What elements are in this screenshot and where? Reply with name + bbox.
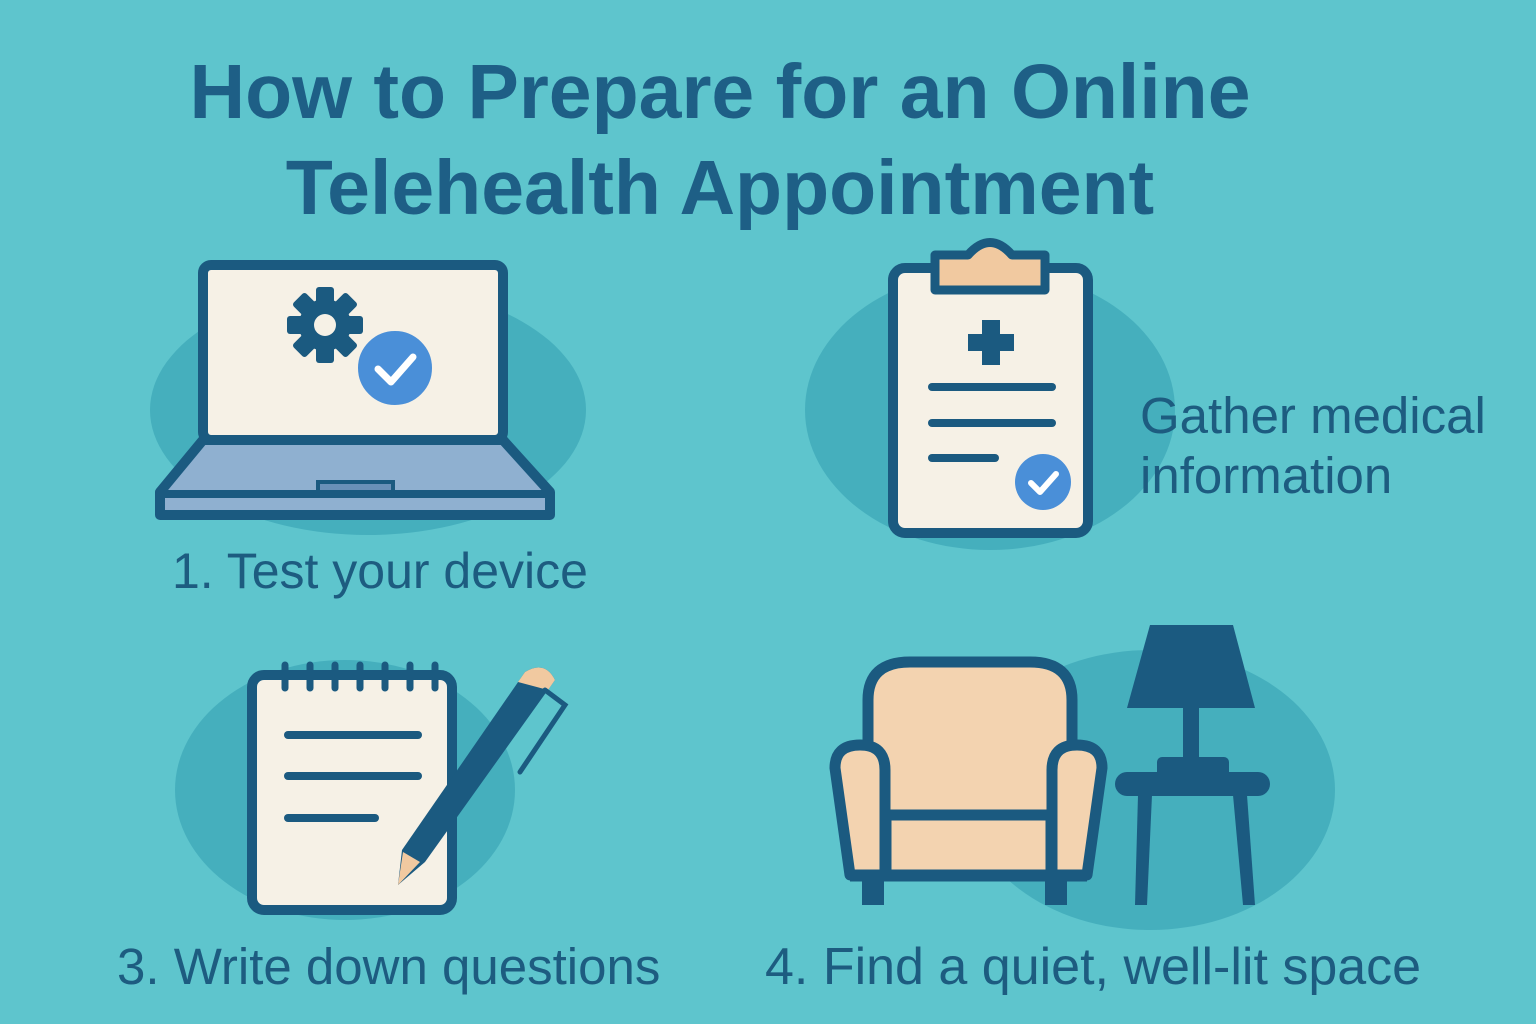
icon: clipboard xyxy=(893,242,1088,533)
panel: write questions xyxy=(175,660,565,920)
icon: armchair xyxy=(835,662,1102,905)
icon: laptop xyxy=(160,265,550,515)
text: step 3: 3. Write down questions xyxy=(117,938,660,995)
icon: pen xyxy=(398,668,565,885)
title: Telehealth Appointment xyxy=(286,145,1154,231)
text: step 2: Gather medical xyxy=(1140,387,1486,444)
icon: check xyxy=(356,329,434,407)
panel: medical info xyxy=(805,242,1175,550)
title: How to Prepare for an Online xyxy=(189,49,1251,135)
text: step 2 xyxy=(1140,387,1486,504)
panel: test device xyxy=(150,265,586,535)
icon: notepad xyxy=(252,665,452,910)
text: step 1: 1. Test your device xyxy=(172,543,588,599)
text: step 4: 4. Find a quiet, well-lit space xyxy=(765,938,1421,996)
text: step 2: information xyxy=(1140,447,1392,504)
panel: quiet space xyxy=(835,625,1335,930)
icon: lamp and table xyxy=(1115,625,1270,905)
icon: gear xyxy=(287,287,363,363)
title xyxy=(189,49,1251,231)
